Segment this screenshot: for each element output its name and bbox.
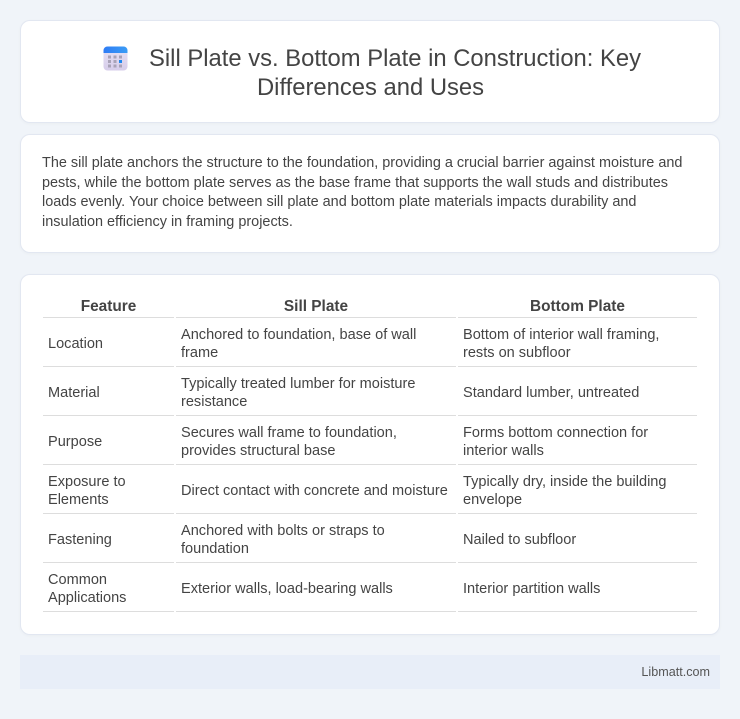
comparison table: Secures wall frame to foundation, bbox=[181, 425, 397, 441]
comparison table: provides structural base bbox=[181, 443, 335, 459]
comparison table: Exterior walls, load-bearing walls bbox=[181, 581, 393, 597]
text block: introduction: loads evenly. Your choice between sill plate and bottom plate materials impacts durability and bbox=[42, 194, 636, 210]
footer credit: Libmatt.com bbox=[641, 665, 710, 679]
comparison table: Bottom of interior wall framing, bbox=[463, 327, 659, 343]
comparison table: Standard lumber, untreated bbox=[463, 385, 639, 401]
comparison table: Interior partition walls bbox=[463, 581, 600, 597]
comparison table: Common bbox=[48, 572, 107, 588]
comparison table: Bottom Plate bbox=[530, 298, 625, 314]
comparison table: Sill Plate bbox=[284, 298, 348, 314]
comparison table: envelope bbox=[463, 492, 522, 508]
comparison table: interior walls bbox=[463, 443, 544, 459]
comparison table: Purpose bbox=[48, 434, 102, 450]
comparison table: Anchored to foundation, base of wall bbox=[181, 327, 416, 343]
icon: calendar grid bbox=[104, 46, 128, 70]
comparison table: Direct contact with concrete and moisture bbox=[181, 483, 448, 499]
comparison table: Material bbox=[48, 385, 100, 401]
comparison table: Nailed to subfloor bbox=[463, 532, 576, 548]
comparison table: Fastening bbox=[48, 532, 112, 548]
comparison table: resistance bbox=[181, 394, 247, 410]
text block: introduction bbox=[42, 155, 682, 230]
comparison table: rests on subfloor bbox=[463, 345, 571, 361]
panel: introduction bbox=[20, 134, 720, 253]
comparison table: Exposure to bbox=[48, 474, 126, 490]
comparison table: Typically dry, inside the building bbox=[463, 474, 666, 490]
title: Sill Plate vs. Bottom Plate in Construction: Key bbox=[149, 45, 641, 72]
title: Differences and Uses bbox=[257, 74, 484, 101]
panel: comparison table bbox=[20, 274, 720, 635]
text block: introduction: The sill plate anchors the structure to the foundation, providing a crucial barrier against moisture and bbox=[42, 155, 682, 171]
comparison table: Elements bbox=[48, 492, 109, 508]
title bbox=[149, 45, 641, 101]
comparison table: Typically treated lumber for moisture bbox=[181, 376, 415, 392]
comparison table: Applications bbox=[48, 590, 126, 606]
comparison table: Feature bbox=[81, 298, 136, 314]
panel: title card bbox=[20, 20, 720, 123]
comparison table: Location bbox=[48, 336, 103, 352]
footer bar bbox=[20, 655, 720, 689]
comparison table: Forms bottom connection for bbox=[463, 425, 648, 441]
comparison table: frame bbox=[181, 345, 218, 361]
text block: introduction: pests, while the bottom plate serves as the base frame that supports the wall studs and distributes bbox=[42, 175, 668, 191]
comparison table: foundation bbox=[181, 541, 249, 557]
comparison table: Anchored with bolts or straps to bbox=[181, 523, 385, 539]
text block: introduction: insulation efficiency in framing projects. bbox=[42, 214, 293, 230]
comparison table bbox=[43, 298, 697, 612]
